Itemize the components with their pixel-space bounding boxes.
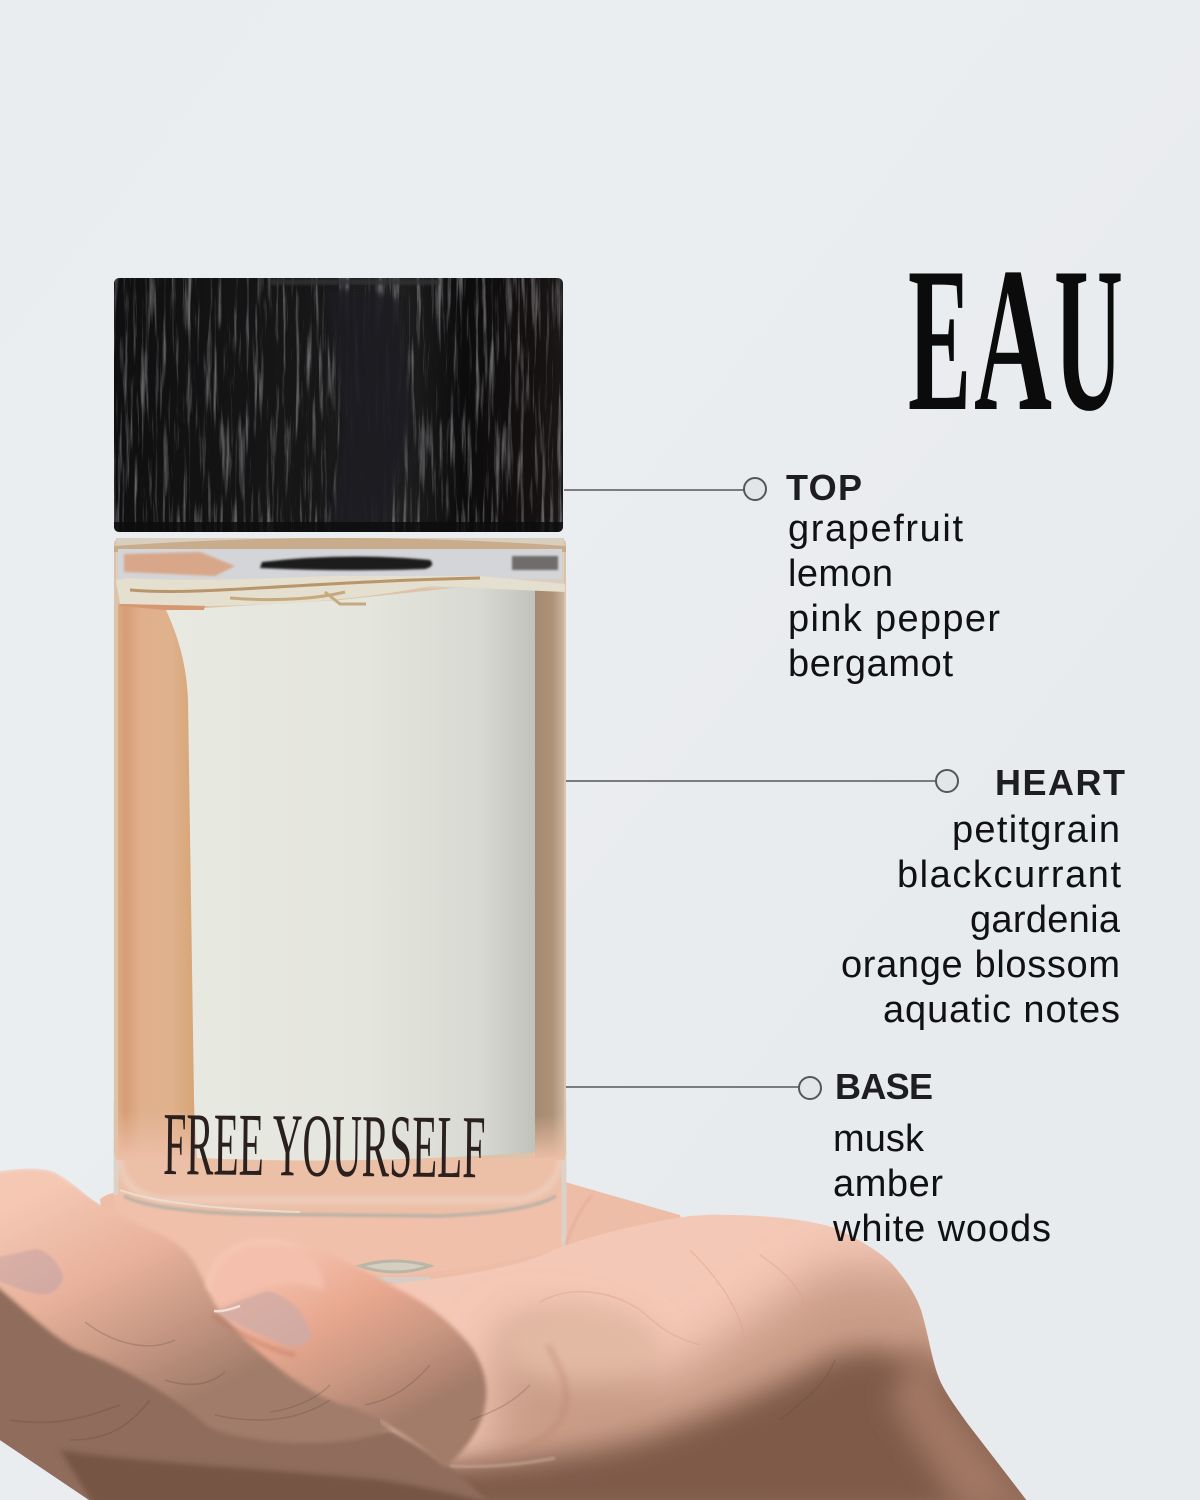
fade to peach at foot of reflections: [116, 1110, 196, 1160]
knuckle creases: [10, 1322, 835, 1440]
fingernail: second finger: [214, 1291, 311, 1346]
mid tones: [480, 1265, 980, 1470]
left amber reflection: [118, 604, 194, 1160]
wooden cap: [114, 278, 563, 535]
notes: base: musk: [833, 1118, 925, 1160]
notes: heart: petitgrain: [952, 809, 1120, 851]
hand: palm crease beside the bottle: [566, 1195, 592, 1245]
hand: palm behind the bottle: [100, 1182, 700, 1300]
notes: heart: blackcurrant: [897, 854, 1121, 896]
hand: fingers and thumb in front of the bottle: [0, 1168, 1060, 1500]
glass neck: [114, 538, 566, 610]
illustration: perfume bottle: FREE YOURSELF: [163, 1095, 486, 1197]
notes: top: grapefruit: [788, 508, 963, 550]
palm creases: [540, 1250, 805, 1345]
thumb fold: [546, 1345, 568, 1394]
notes: heart: gardenia: [970, 899, 1121, 941]
fade to peach at foot of right reflection: [533, 1115, 565, 1160]
back of hand: [0, 1302, 482, 1500]
paper label seen through glass: [166, 583, 535, 1160]
underside base tone: [0, 1280, 400, 1500]
notes: top: bergamot: [788, 643, 953, 685]
glass base: [114, 1100, 566, 1280]
notes: heart: aquatic notes: [883, 989, 1120, 1031]
nail tip: [214, 1306, 240, 1311]
fingernail: first finger: [0, 1249, 63, 1294]
notes: top: lemon: [788, 553, 893, 595]
illustration: perfume bottle: [114, 278, 566, 1280]
wordmark: EAU: [908, 225, 1123, 454]
notes: heart: orange blossom: [841, 944, 1120, 986]
notes: top: [786, 467, 1000, 685]
notes: heart: [841, 762, 1125, 1031]
palm: [380, 1214, 1060, 1500]
text: U: [1054, 225, 1123, 454]
connector: top notes: [564, 478, 766, 500]
glass body: [114, 538, 566, 1158]
fingertip highlight: [282, 1265, 323, 1288]
finger two: [205, 1238, 486, 1468]
right edge warm tone: [890, 1330, 1034, 1500]
notes: base: amber: [833, 1163, 943, 1205]
notes: base: BASE: [835, 1066, 933, 1107]
shadow next to nail: [212, 1315, 295, 1355]
connector: heart notes: [566, 770, 958, 792]
notes: top: TOP: [786, 467, 862, 508]
wordmark: EAU: A: [974, 225, 1052, 454]
thumb pale line: [450, 1458, 555, 1467]
connector: base notes: [566, 1077, 821, 1099]
wordmark: EAU: E: [908, 225, 971, 454]
notes: heart: HEART: [995, 762, 1125, 803]
shadow at the underside: [0, 1334, 1026, 1500]
notes: base: [832, 1066, 1051, 1250]
thumb mound: [511, 1311, 649, 1390]
notes: base: white woods: [832, 1208, 1051, 1250]
finger one: [0, 1168, 392, 1443]
notes: top: pink pepper: [788, 598, 1000, 640]
right amber reflection: [535, 586, 564, 1158]
lowest finger: [60, 1450, 520, 1500]
